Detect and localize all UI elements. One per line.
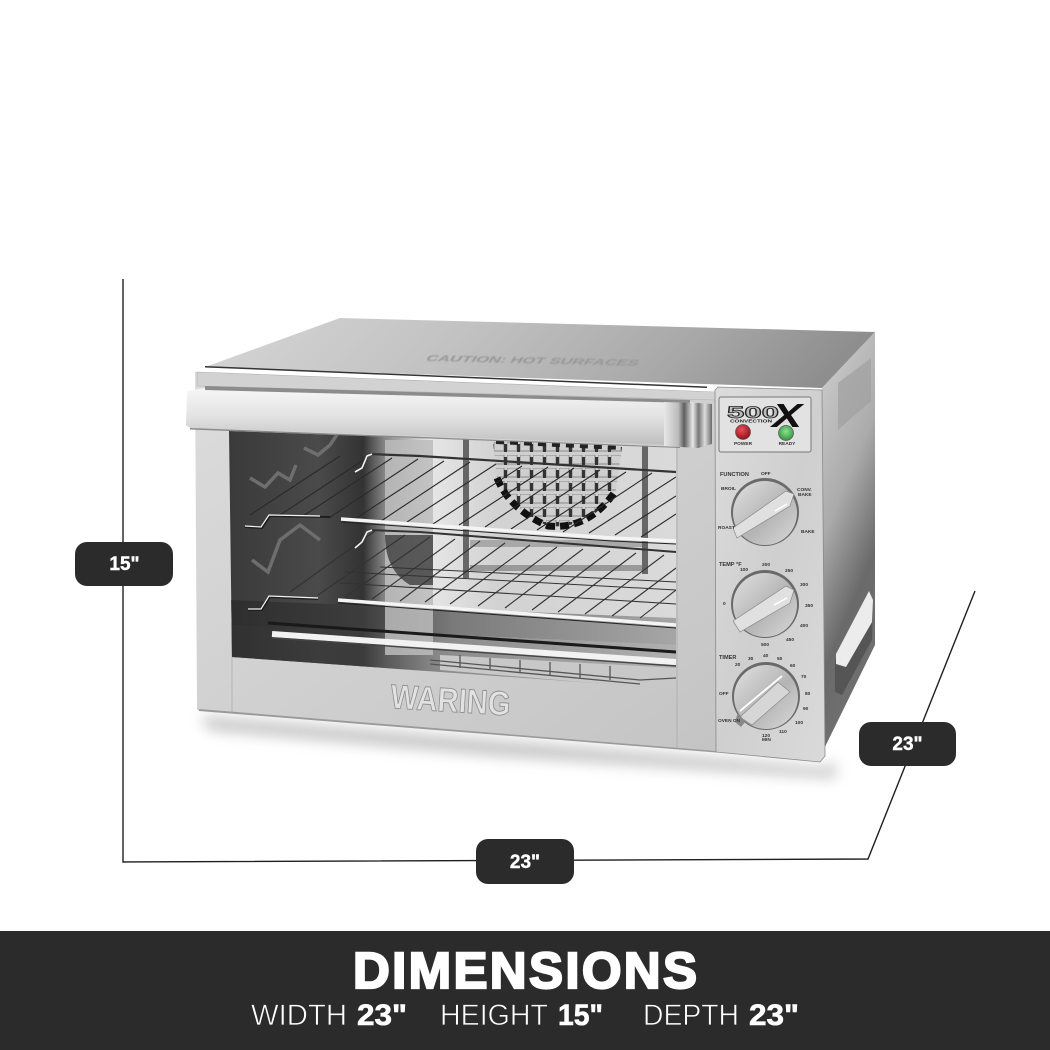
control panel: [715, 387, 825, 762]
timer dial: [718, 653, 811, 743]
footer banner: [0, 931, 1050, 1050]
indicator labels: READY: [779, 441, 796, 447]
footer dimension summary: [251, 999, 799, 1032]
depth label pill: 23": [892, 734, 923, 755]
depth label pill: [859, 722, 956, 766]
temperature dial: 200: [762, 562, 770, 568]
left wall rack supports: [250, 433, 338, 572]
height label pill: [75, 542, 173, 586]
oven top surface: CAUTION: HOT SURFACES: [424, 354, 641, 368]
footer heading: DIMENSIONS: [353, 942, 697, 999]
badge: 500X convection: CONVECTION: [730, 418, 773, 424]
icon: convection fan grille: [493, 441, 622, 530]
temperature dial: 500: [761, 642, 769, 648]
temperature dial: 0: [723, 601, 726, 607]
temperature dial: 250: [785, 568, 793, 574]
footer dimension summary: HEIGHT: [440, 999, 548, 1032]
oven bottom tray bar: [268, 623, 676, 684]
badge: 500X convection: 500: [727, 403, 779, 422]
timer dial: 70: [801, 674, 807, 680]
upper oven rack: [245, 454, 676, 544]
footer dimension summary: WIDTH: [251, 999, 347, 1032]
oven side panel: [822, 332, 875, 753]
footer dimension summary: DEPTH: [643, 999, 739, 1032]
timer dial: 80: [805, 691, 811, 697]
timer dial: 90: [803, 706, 809, 712]
footer dimension summary: 23": [357, 999, 407, 1032]
width label pill: [476, 839, 574, 884]
timer dial: 20: [735, 662, 741, 668]
temperature dial: 400: [800, 623, 808, 629]
lower oven rack: [248, 530, 676, 628]
temperature dial: 100: [740, 567, 748, 573]
icon: power light: [736, 424, 750, 440]
indicator labels: POWER: [734, 441, 753, 447]
badge: 500X convection: [719, 397, 811, 452]
temperature dial: 350: [805, 603, 813, 609]
oven window interior: [229, 431, 676, 691]
timer dial: 40: [763, 653, 769, 659]
function dial: [718, 471, 815, 546]
timer dial: 50: [777, 656, 783, 662]
function dial: BROIL: [721, 486, 736, 492]
footer dimension summary: 23": [749, 999, 799, 1032]
function dial: FUNCTION: [720, 472, 749, 478]
timer dial: OVEN ON: [718, 718, 741, 724]
dimension lines: [123, 279, 975, 862]
icon: ready light: [778, 426, 794, 440]
function dial: BAKE: [801, 529, 815, 535]
footer dimension summary: 15": [558, 999, 603, 1032]
timer dial: 120: [762, 733, 770, 739]
function dial: CONV.: [797, 487, 812, 493]
infographic canvas: [0, 279, 1050, 1050]
temperature dial: 450: [786, 637, 794, 643]
height label pill: 15": [109, 554, 140, 575]
width label pill: 23": [510, 852, 540, 873]
timer dial: 60: [790, 663, 796, 669]
WARING logo: WARING: [389, 678, 512, 724]
badge: 500X convection: X: [769, 397, 805, 434]
temperature dial: TEMP °F: [719, 562, 742, 568]
oven top surface: [205, 318, 875, 388]
indicator labels: [734, 441, 796, 447]
timer dial: 100: [795, 720, 803, 726]
function dial: OFF: [761, 471, 771, 477]
oven product illustration: [186, 318, 875, 778]
temperature dial: 300: [800, 582, 808, 588]
oven door handle: [186, 372, 716, 448]
timer dial: MIN: [762, 737, 771, 743]
function dial: ROAST: [718, 525, 735, 531]
oven door frame: [195, 372, 716, 752]
temperature dial: [719, 562, 813, 648]
timer dial: 30: [748, 656, 754, 662]
function dial: BAKE: [798, 492, 812, 498]
timer dial: 110: [779, 729, 787, 735]
timer dial: OFF: [719, 691, 729, 697]
timer dial: TIMER: [719, 655, 736, 661]
